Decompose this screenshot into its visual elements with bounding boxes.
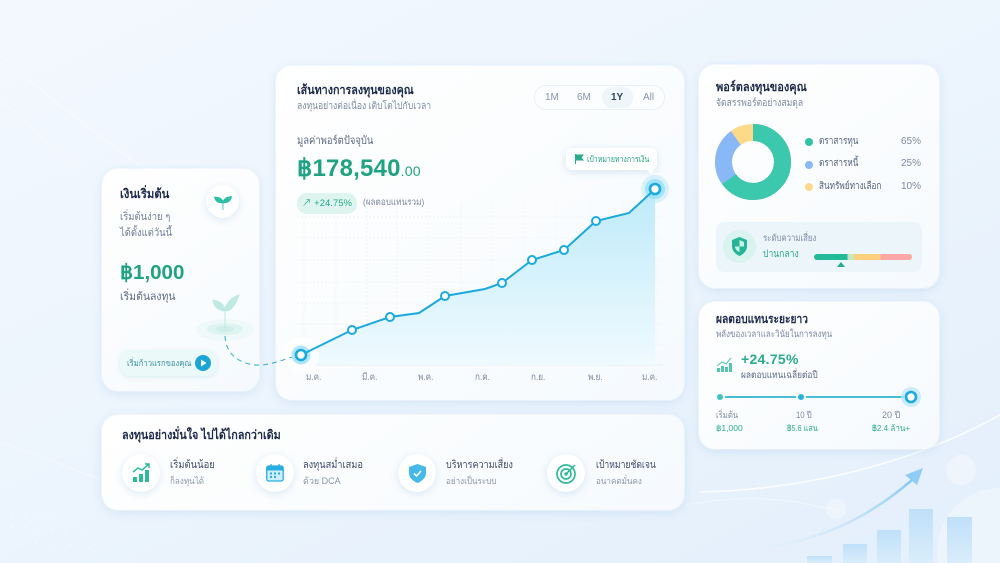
legend xyxy=(805,136,921,192)
value: portfolio: ฿178,540.00 xyxy=(297,155,421,182)
heading: ลงทุนอย่างมั่นใจ ไปได้ไกลกว่าเดิม xyxy=(122,428,281,442)
risk panel: ระดับความเสี่ยง xyxy=(763,233,816,244)
panel: starting capital xyxy=(102,169,259,391)
period selector: 6M xyxy=(577,92,591,103)
label: current value: มูลค่าพอร์ตปัจจุบัน xyxy=(297,135,373,147)
item: start small: เริ่มต้นน้อย xyxy=(170,459,215,471)
item: regular investing: ลงทุนสม่ำเสมอ xyxy=(303,459,363,471)
item: risk management: อย่างเป็นระบบ xyxy=(446,476,497,486)
legend: สินทรัพย์ทางเลือก xyxy=(819,181,881,192)
chart axis labels: ม.ค. xyxy=(642,372,657,383)
legend: ตราสารทุน xyxy=(819,136,858,147)
timeline labels: 20 ปี xyxy=(882,410,900,420)
legend: 25% xyxy=(901,158,921,169)
value: return: +24.75% xyxy=(741,351,799,367)
badge: return xyxy=(297,193,357,214)
icon: shield check xyxy=(398,454,436,492)
chart axis labels: ก.ค. xyxy=(475,372,490,383)
panel: invest with confidence xyxy=(102,415,684,510)
chart axis labels: พ.ย. xyxy=(588,372,603,383)
icon: play xyxy=(195,355,211,371)
subheading: พลังของเวลาและวินัยในการลงทุน xyxy=(716,329,832,340)
description: ได้ตั้งแต่วันนี้ xyxy=(120,227,172,239)
heading: พอร์ตลงทุนของคุณ xyxy=(716,80,807,94)
illustration: growing sprout xyxy=(196,294,251,340)
timeline labels: ฿2.4 ล้าน+ xyxy=(872,423,910,433)
icon: flag xyxy=(575,154,584,164)
heading: ผลตอบแทนระยะยาว xyxy=(716,312,808,326)
chart axis labels xyxy=(306,372,657,383)
panel: investment journey chart xyxy=(276,66,684,400)
risk meter xyxy=(814,254,912,260)
callout: financial goal xyxy=(566,148,657,170)
period selector: 1Y xyxy=(611,92,623,103)
callout: financial goal: เป้าหมายทางการเงิน xyxy=(587,154,649,164)
marker xyxy=(837,262,845,267)
label: เริ่มต้นลงทุน xyxy=(120,291,176,303)
legend: 65% xyxy=(901,136,921,147)
timeline labels: ฿5.6 แสน xyxy=(787,423,818,433)
item: clear goal: เป้าหมายชัดเจน xyxy=(596,459,656,471)
panel: portfolio allocation xyxy=(699,65,939,288)
subheading: ลงทุนอย่างต่อเนื่อง เติบโตไปกับเวลา xyxy=(297,101,431,112)
selected period xyxy=(602,87,633,108)
icon: growth bars xyxy=(716,358,732,372)
legend: 10% xyxy=(901,181,921,192)
timeline labels: เริ่มต้น xyxy=(716,410,738,420)
item: regular investing: ด้วย DCA xyxy=(303,476,341,486)
period selector: 1M xyxy=(545,92,559,103)
button: first step xyxy=(120,350,217,376)
icon: growth chart xyxy=(122,454,160,492)
callout pointer xyxy=(647,170,655,174)
item: clear goal xyxy=(544,454,656,496)
item: regular investing xyxy=(254,454,363,496)
chart axis labels: ก.ย. xyxy=(531,372,545,383)
icon: target xyxy=(547,454,585,492)
item: start small xyxy=(120,454,215,496)
item: clear goal: อนาคตมั่นคง xyxy=(596,476,642,486)
item: risk management: บริหารความเสี่ยง xyxy=(446,459,513,471)
subheading: จัดสรรพอร์ตอย่างสมดุล xyxy=(716,98,803,109)
description: เริ่มต้นง่าย ๆ xyxy=(120,211,170,223)
icon: shield xyxy=(723,230,756,263)
legend: ตราสารหนี้ xyxy=(819,158,858,169)
label: ผลตอบแทนเฉลี่ยต่อปี xyxy=(741,370,818,381)
risk panel xyxy=(716,222,922,272)
timeline labels: ฿1,000 xyxy=(716,423,743,433)
item: risk management xyxy=(396,454,513,496)
value: 1000 baht: ฿1,000 xyxy=(120,261,184,284)
heading: เงินเริ่มต้น xyxy=(120,187,169,201)
timeline labels: 10 ปี xyxy=(796,410,812,420)
badge: return: ↗ +24.75% xyxy=(302,198,352,209)
chart axis labels: มี.ค. xyxy=(362,372,377,383)
icon: sprout badge xyxy=(206,185,239,218)
period selector: All xyxy=(643,92,654,103)
period selector xyxy=(534,85,665,110)
label: total return: (ผลตอบแทนรวม) xyxy=(363,197,424,208)
item: start small: ก็ลงทุนได้ xyxy=(170,476,204,486)
risk panel: ปานกลาง xyxy=(763,249,799,260)
donut chart xyxy=(715,124,791,200)
button: first step: เริ่มก้าวแรกของคุณ xyxy=(127,358,191,368)
timeline xyxy=(717,387,921,407)
timeline labels xyxy=(716,408,910,433)
chart axis labels: พ.ค. xyxy=(418,372,433,383)
heading: journey: เส้นทางการลงทุนของคุณ xyxy=(297,83,414,97)
panel: long-term return xyxy=(699,302,939,449)
description xyxy=(119,209,172,239)
icon: calendar xyxy=(256,454,294,492)
chart axis labels: ม.ค. xyxy=(306,372,321,383)
